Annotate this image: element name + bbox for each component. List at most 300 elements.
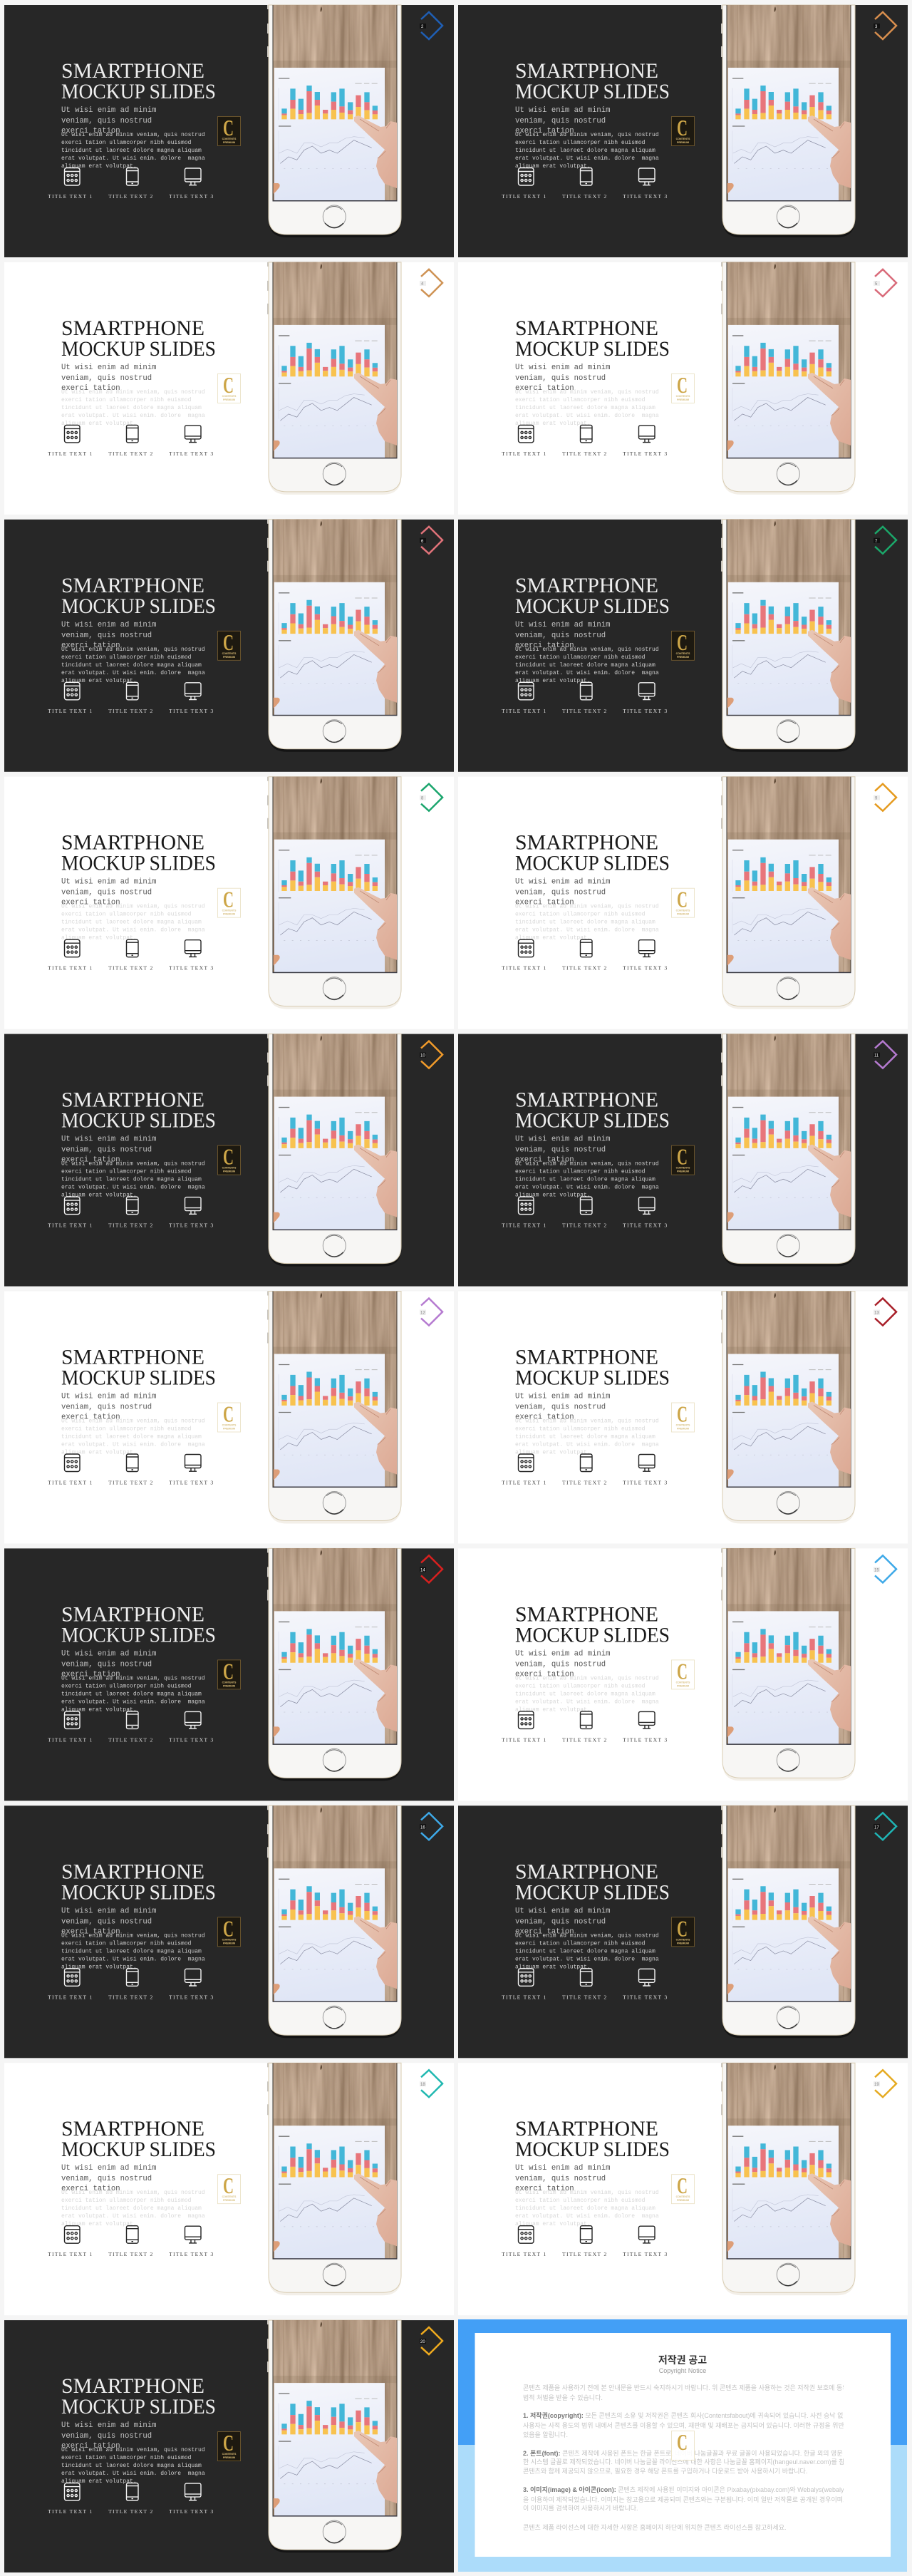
notice subheading: Copyright Notice [659,2367,706,2374]
slide 3: dark [458,5,908,257]
body text: tincidunt ut laoreet dolore magna aliquam [61,1691,202,1697]
phone mockup [721,2063,855,2295]
body text: Ut wisi enim ad minim veniam, quis nostrud [61,1932,205,1939]
title: MOCKUP SLIDES [515,2138,670,2161]
subtitle: exerci tation [515,127,574,135]
page number badge [874,2070,896,2097]
body text: erat volutpat. Ut wisi enim. dolore magna [61,1441,205,1448]
icon: monitor [185,683,201,700]
body text: tincidunt ut laoreet dolore magna aliquam [515,1691,656,1697]
page number badge [874,784,896,811]
title [515,59,670,103]
body text: erat volutpat. Ut wisi enim. dolore magna [515,1699,659,1705]
icon captions: TITLE TEXT 2 [108,1222,153,1229]
icon: keypad [519,1197,534,1215]
logo [218,1915,241,1947]
page number badge: 20 [420,2340,425,2344]
body text: tincidunt ut laoreet dolore magna aliquam [61,1177,202,1183]
title: SMARTPHONE [61,1860,204,1883]
subtitle: exerci tation [61,1927,120,1936]
icon: monitor [638,426,655,443]
page number badge: 11 [874,1054,879,1058]
title [61,59,216,103]
body text: tincidunt ut laoreet dolore magna aliquam [515,1948,656,1954]
phone mockup [267,1034,401,1267]
page number badge [420,1041,442,1068]
body text: erat volutpat. Ut wisi enim. dolore magna [61,1185,205,1191]
phone mockup [267,520,401,752]
logo [671,887,694,917]
title [515,1088,670,1133]
body text: aliquam erat volutpat. [515,1706,591,1713]
page number badge: 6 [421,540,424,544]
logo: PREMIUM [677,141,689,144]
subtitle: veniam, quis nostrud [515,1917,606,1926]
body text [515,2190,659,2227]
logo: CONTENTS [222,395,237,398]
icon: phone [127,1969,138,1986]
body text: exerci tation ullamcorper nibh euismod [515,140,646,146]
body text: Ut wisi enim ad minim veniam, quis nostrud [515,1932,659,1939]
phone mockup [721,1805,855,2038]
subtitle: exerci tation [61,384,120,393]
page number badge [874,527,896,554]
icon captions: TITLE TEXT 3 [169,708,214,714]
title: MOCKUP SLIDES [61,852,216,875]
page number badge [874,1299,896,1326]
body text: aliquam erat volutpat. [61,2221,137,2227]
subtitle: exerci tation [515,1156,574,1165]
subtitle: veniam, quis nostrud [61,2432,152,2441]
logo: CONTENTS [222,1681,237,1684]
icon captions: TITLE TEXT 2 [108,193,153,200]
icon captions: TITLE TEXT 2 [562,193,607,200]
subtitle [515,1393,611,1421]
title: MOCKUP SLIDES [61,1880,216,1904]
body text: Ut wisi enim ad minim veniam, quis nostrud [61,2447,205,2453]
icon captions: TITLE TEXT 3 [169,1736,214,1743]
title: MOCKUP SLIDES [515,80,670,103]
title: MOCKUP SLIDES [61,2395,216,2418]
subtitle: veniam, quis nostrud [61,374,152,383]
icon captions: TITLE TEXT 1 [502,1736,546,1743]
icon captions: TITLE TEXT 3 [169,1994,214,2000]
title [61,831,216,875]
notice heading: 저작권 공고 [658,2354,707,2366]
title: MOCKUP SLIDES [515,594,670,618]
icon: monitor [185,1969,201,1986]
title [515,831,670,875]
phone mockup [721,262,855,495]
icon captions: TITLE TEXT 1 [48,1480,93,1485]
title: MOCKUP SLIDES [61,337,216,361]
body text [515,1161,659,1199]
notice body text: 있음을 알립니다. [523,2431,568,2438]
subtitle: exerci tation [515,1927,574,1936]
notice body text [523,2384,844,2530]
panel background [458,1805,908,2058]
body text: aliquam erat volutpat. [515,421,591,427]
page number badge: 13 [874,1312,879,1316]
body text: Ut wisi enim ad minim veniam, quis nostrud [515,904,659,910]
logo: C [223,1915,234,1941]
subtitle: Ut wisi enim ad minim [61,621,157,629]
subtitle [61,878,157,907]
page number badge [420,2070,442,2097]
title: SMARTPHONE [61,59,204,83]
subtitle [61,1393,157,1421]
icon: monitor [185,1711,201,1729]
icon: keypad [64,939,80,957]
slide 6: dark [4,520,454,772]
body text [515,389,659,427]
body text: Ut wisi enim ad minim veniam, quis nostrud [61,646,205,653]
icon captions [48,193,214,200]
title: SMARTPHONE [61,2117,204,2140]
panel background [4,5,454,257]
title [61,1088,216,1133]
logo: PREMIUM [677,2199,689,2202]
subtitle: Ut wisi enim ad minim [61,878,157,887]
subtitle [515,106,611,135]
icon captions: TITLE TEXT 2 [562,1480,607,1485]
title: MOCKUP SLIDES [61,594,216,618]
logo: CONTENTS [676,1167,690,1170]
body text: Ut wisi enim ad minim veniam, quis nostrud [515,132,659,138]
subtitle: exerci tation [61,2185,120,2193]
body text: erat volutpat. Ut wisi enim. dolore magna [515,155,659,162]
page number badge: 12 [420,1312,425,1316]
body text: aliquam erat volutpat. [515,1450,591,1456]
logo: PREMIUM [223,2456,235,2459]
body text [515,904,659,942]
icon captions: TITLE TEXT 2 [562,708,607,714]
icon captions [48,2251,214,2257]
panel background [458,1548,908,1800]
logo: CONTENTS [676,138,690,140]
body text: erat volutpat. Ut wisi enim. dolore magna [61,1699,205,1705]
icon captions: TITLE TEXT 1 [502,708,546,714]
icon captions: TITLE TEXT 3 [169,1222,214,1229]
page number badge [420,1299,442,1326]
icon: phone [127,2483,138,2500]
logo: PREMIUM [223,656,235,659]
icon: keypad [64,1454,80,1471]
slide 10: dark [4,1034,454,1287]
body text [61,132,205,170]
logo: PREMIUM [677,913,689,916]
icon captions [48,708,214,714]
notice body text: 이 이미지를 검색하여 사용하시기 바랍니다. [523,2504,638,2512]
icon captions: TITLE TEXT 1 [502,450,546,457]
body text: exerci tation ullamcorper nibh euismod [515,1940,646,1947]
body text: Ut wisi enim ad minim veniam, quis nostrud [61,904,205,910]
subtitle [61,106,157,135]
body text: exerci tation ullamcorper nibh euismod [515,2198,646,2204]
phone mockup [721,777,855,1009]
icon: monitor [185,2483,201,2500]
logo: C [677,1658,688,1684]
slide 13: light [458,1292,908,1544]
subtitle: Ut wisi enim ad minim [61,1135,157,1144]
panel background [4,777,454,1029]
page number badge [420,12,442,39]
page number badge: 17 [874,1825,879,1830]
subtitle: Ut wisi enim ad minim [515,2164,611,2173]
logo: PREMIUM [223,913,235,916]
page number badge: 10 [420,1054,425,1058]
body text: tincidunt ut laoreet dolore magna aliquam [515,2205,656,2212]
body text: tincidunt ut laoreet dolore magna aliquam [61,2205,202,2212]
body text [61,389,205,427]
body text: tincidunt ut laoreet dolore magna aliquam [515,919,656,926]
body text: erat volutpat. Ut wisi enim. dolore magna [61,155,205,162]
subtitle: veniam, quis nostrud [61,1146,152,1155]
icon captions: TITLE TEXT 2 [562,2251,607,2257]
logo: PREMIUM [677,1170,689,1173]
body text [61,904,205,942]
icon: phone [580,425,592,443]
body text: exerci tation ullamcorper nibh euismod [515,1683,646,1689]
logo: C [223,2430,234,2456]
icon: keypad [64,1197,80,1215]
body text: aliquam erat volutpat. [61,421,137,427]
icon: monitor [185,940,201,957]
logo: PREMIUM [223,1427,235,1430]
title: SMARTPHONE [61,2374,204,2398]
subtitle: veniam, quis nostrud [61,1403,152,1411]
icon captions: TITLE TEXT 3 [169,2251,214,2257]
title: SMARTPHONE [515,2117,658,2140]
logo: CONTENTS [676,2195,690,2198]
title: SMARTPHONE [61,831,204,855]
body text: erat volutpat. Ut wisi enim. dolore magna [515,413,659,419]
body text: aliquam erat volutpat. [61,678,137,684]
logo: C [223,1401,234,1427]
icon captions: TITLE TEXT 2 [108,2251,153,2257]
panel background [4,1805,454,2058]
page number badge: 14 [420,1568,425,1572]
body text: tincidunt ut laoreet dolore magna aliquam [61,1948,202,1954]
icon: phone [580,2226,592,2243]
logo: CONTENTS [222,2195,237,2198]
icon captions: TITLE TEXT 2 [562,450,607,457]
title [61,1346,216,1390]
logo [218,115,241,145]
icon captions: TITLE TEXT 3 [169,1480,214,1485]
subtitle: Ut wisi enim ad minim [61,1649,157,1658]
logo [671,1915,694,1947]
body text: aliquam erat volutpat. [61,1192,137,1199]
panel background [458,5,908,257]
subtitle: veniam, quis nostrud [61,1917,152,1926]
subtitle [61,621,157,650]
phone mockup [267,262,401,495]
icon: phone [580,1197,592,1215]
body text: exerci tation ullamcorper nibh euismod [61,2455,192,2461]
page number badge: 5 [875,282,878,287]
icon captions: TITLE TEXT 1 [502,1480,546,1485]
icon captions: TITLE TEXT 2 [562,965,607,972]
title: MOCKUP SLIDES [515,1880,670,1904]
page number badge [874,12,896,39]
logo [671,372,694,403]
body text: aliquam erat volutpat. [515,678,591,684]
subtitle: exerci tation [515,642,574,650]
page number badge [420,784,442,811]
body text: aliquam erat volutpat. [61,1964,137,1970]
body text: exerci tation ullamcorper nibh euismod [61,654,192,661]
notice background: dark blue top [458,2319,907,2445]
title [515,1602,670,1647]
title: MOCKUP SLIDES [61,2138,216,2161]
icon captions [48,450,214,457]
icon: monitor [185,426,201,443]
logo: C [677,887,688,912]
logo: CONTENTS [676,652,690,655]
icon captions [502,1222,668,1229]
title: SMARTPHONE [515,1602,658,1626]
phone mockup [267,777,401,1009]
subtitle: Ut wisi enim ad minim [61,2421,157,2430]
notice white card [475,2333,891,2557]
slide 12: light [4,1292,454,1544]
page number badge: 15 [874,1568,879,1572]
panel background [458,520,908,772]
slide 16: dark [4,1805,454,2058]
logo: PREMIUM [223,1170,235,1173]
icon: phone [127,939,138,957]
icon: keypad [64,1969,80,1986]
body text: aliquam erat volutpat. [61,1706,137,1713]
icon: phone [580,1711,592,1729]
phone mockup [267,2320,401,2552]
title [515,316,670,361]
logo: PREMIUM [677,398,689,401]
logo: C [223,372,234,398]
subtitle: veniam, quis nostrud [515,889,606,897]
subtitle: exerci tation [61,2442,120,2451]
icon captions [48,1222,214,1229]
body text: aliquam erat volutpat. [515,1964,591,1970]
logo [218,1144,241,1175]
subtitle: exerci tation [61,1156,120,1165]
icon: keypad [64,2483,80,2500]
icon captions: TITLE TEXT 1 [502,2251,546,2257]
panel background [458,2063,908,2315]
logo: CONTENTS [222,910,237,912]
title [515,1346,670,1390]
body text: tincidunt ut laoreet dolore magna aliquam [61,148,202,154]
title: SMARTPHONE [515,316,658,340]
icon captions: TITLE TEXT 2 [562,1994,607,2000]
title: SMARTPHONE [61,1088,204,1112]
subtitle [515,1135,611,1165]
page number badge [874,1555,896,1582]
icon captions: TITLE TEXT 3 [623,708,668,714]
body text [515,646,659,684]
panel background [4,2063,454,2315]
icon captions [502,450,668,457]
icon captions: TITLE TEXT 3 [623,450,668,457]
icon captions: TITLE TEXT 3 [623,965,668,972]
subtitle: Ut wisi enim ad minim [515,364,611,372]
body text: exerci tation ullamcorper nibh euismod [61,397,192,403]
panel background [4,1034,454,1287]
logo: CONTENTS [676,1424,690,1427]
icon captions: TITLE TEXT 1 [48,450,93,457]
subtitle [61,1907,157,1936]
slide 4: light [4,262,454,515]
subtitle [61,364,157,393]
icon captions: TITLE TEXT 2 [108,965,153,972]
subtitle: Ut wisi enim ad minim [515,1393,611,1401]
body text [61,1161,205,1199]
icon: keypad [64,682,80,700]
logo [218,372,241,403]
body text: aliquam erat volutpat. [515,935,591,942]
subtitle: Ut wisi enim ad minim [515,106,611,115]
title: MOCKUP SLIDES [61,1623,216,1647]
icon captions: TITLE TEXT 3 [623,2251,668,2257]
panel background [458,262,908,515]
title: SMARTPHONE [515,574,658,597]
logo [671,629,694,660]
notice logo [671,2429,694,2461]
logo [671,115,694,145]
icon: keypad [519,2226,534,2243]
title: SMARTPHONE [515,831,658,855]
phone mockup [721,1292,855,1524]
icon captions: TITLE TEXT 2 [562,1222,607,1229]
logo [671,1401,694,1432]
icon captions: TITLE TEXT 3 [623,1736,668,1743]
icon captions: TITLE TEXT 3 [169,965,214,972]
panel background [458,1034,908,1287]
subtitle [515,364,611,393]
body text: Ut wisi enim ad minim veniam, quis nostrud [61,1161,205,1168]
logo [218,2173,241,2204]
notice body text: 콘텐츠 제품 라이선스에 대한 자세한 사항은 홈페이지 하단에 위치한 콘텐츠 라이선스를 참고하세요. [523,2523,787,2531]
icon: monitor [638,1197,655,1214]
body text [61,1932,205,1970]
title: MOCKUP SLIDES [515,852,670,875]
subtitle: Ut wisi enim ad minim [515,621,611,629]
phone mockup [267,1292,401,1524]
icon: monitor [638,1969,655,1986]
phone mockup [267,1805,401,2038]
page number badge: 3 [875,25,878,29]
body text: tincidunt ut laoreet dolore magna aliquam [61,919,202,926]
body text [61,646,205,684]
icon captions: TITLE TEXT 3 [169,450,214,457]
panel background [4,262,454,515]
page number badge [874,1041,896,1068]
icon captions: TITLE TEXT 1 [48,2251,93,2257]
icon captions: TITLE TEXT 2 [562,1736,607,1743]
logo: C [223,887,234,912]
logo: C [223,629,234,655]
title: MOCKUP SLIDES [61,80,216,103]
icon: phone [127,682,138,700]
phone mockup [721,1034,855,1267]
icon: phone [580,1969,592,1986]
title: SMARTPHONE [61,1602,204,1626]
body text: tincidunt ut laoreet dolore magna aliquam [61,662,202,669]
logo: CONTENTS [676,910,690,912]
body text: aliquam erat volutpat. [61,163,137,170]
subtitle: exerci tation [61,1413,120,1421]
